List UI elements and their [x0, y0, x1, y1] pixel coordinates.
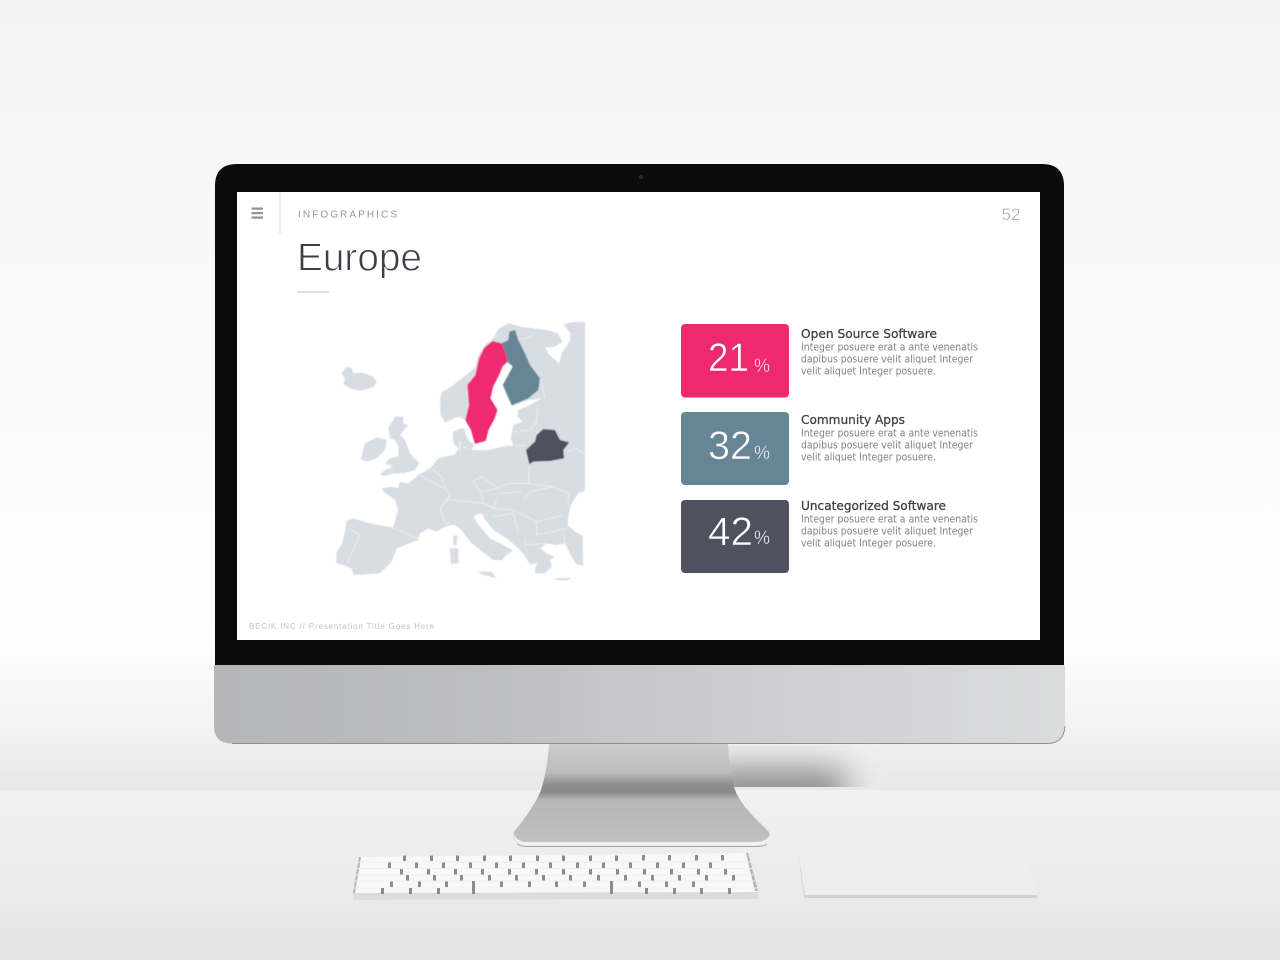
text block: Community Apps: Integer posuere erat a ante venenatis — [801, 428, 978, 440]
slide screen — [237, 192, 1040, 640]
title: Europe — [297, 236, 422, 280]
land: Iceland, Britain, Ireland (crop frame B) — [342, 367, 419, 476]
highlighted countries — [465, 330, 569, 464]
text block: Uncategorized Software: velit aliquet Integer posuere. — [801, 538, 936, 550]
stat card: 21%: 21 — [708, 336, 749, 380]
stat card: 21%: % — [754, 356, 770, 377]
monitor body — [214, 164, 1065, 744]
text block: Open Source Software: Integer posuere erat a ante venenatis — [801, 342, 978, 354]
stat card: 42%: % — [754, 528, 770, 549]
text block: Community Apps: Community Apps — [801, 412, 905, 427]
monitor shadow on wall — [728, 747, 864, 787]
northern and eastern land, Baltic, countries (crop frame A) — [437, 322, 585, 475]
title underline — [297, 292, 329, 293]
text block: Community Apps — [801, 412, 978, 464]
text block: Community Apps: velit aliquet Integer posuere. — [801, 452, 936, 464]
text block: Open Source Software: Open Source Software — [801, 326, 937, 341]
stat card: 32%: 32 — [708, 424, 752, 468]
footer text: BECIK.INC // Presentation Title Goes Here — [249, 622, 435, 631]
Finland — [493, 330, 540, 406]
keyboard — [353, 853, 758, 900]
stat card: 42% — [681, 500, 789, 573]
monitor stand — [514, 744, 770, 846]
Belarus — [526, 429, 569, 464]
text block: Open Source Software: dapibus posuere velit aliquet Integer — [801, 354, 974, 366]
land: Italy, Balkans, Turkey (crop frame D) — [450, 460, 585, 581]
trackpad — [798, 852, 1037, 898]
section label: INFOGRAPHICS — [298, 210, 397, 220]
text block: Open Source Software: velit aliquet Integer posuere. — [801, 366, 936, 378]
header divider — [280, 192, 281, 234]
text block: Uncategorized Software: Uncategorized Software — [801, 498, 946, 513]
text block: Uncategorized Software: Integer posuere erat a ante venenatis — [801, 514, 978, 526]
text block: Open Source Software — [801, 326, 978, 378]
text block: Uncategorized Software — [801, 498, 978, 550]
stat card: 42%: 42 — [708, 510, 753, 554]
monitor chin — [214, 665, 1065, 744]
monitor bezel — [215, 164, 1064, 665]
key rows — [354, 862, 757, 888]
stat card: 32%: % — [754, 443, 770, 464]
stat card: 21% — [681, 324, 789, 398]
webcam — [639, 175, 643, 179]
text block: Uncategorized Software: dapibus posuere velit aliquet Integer — [801, 526, 974, 538]
key gaps — [381, 855, 735, 894]
Europe map — [336, 322, 585, 581]
land: France, Iberia, western mainland (crop frame C) — [336, 450, 490, 575]
menu icon — [252, 208, 263, 219]
text block: Community Apps: dapibus posuere velit aliquet Integer — [801, 440, 974, 452]
Sweden — [465, 341, 507, 444]
page number: 52 — [1002, 205, 1020, 224]
background: desk surface — [0, 790, 1280, 960]
stat card: 32% — [681, 412, 789, 485]
